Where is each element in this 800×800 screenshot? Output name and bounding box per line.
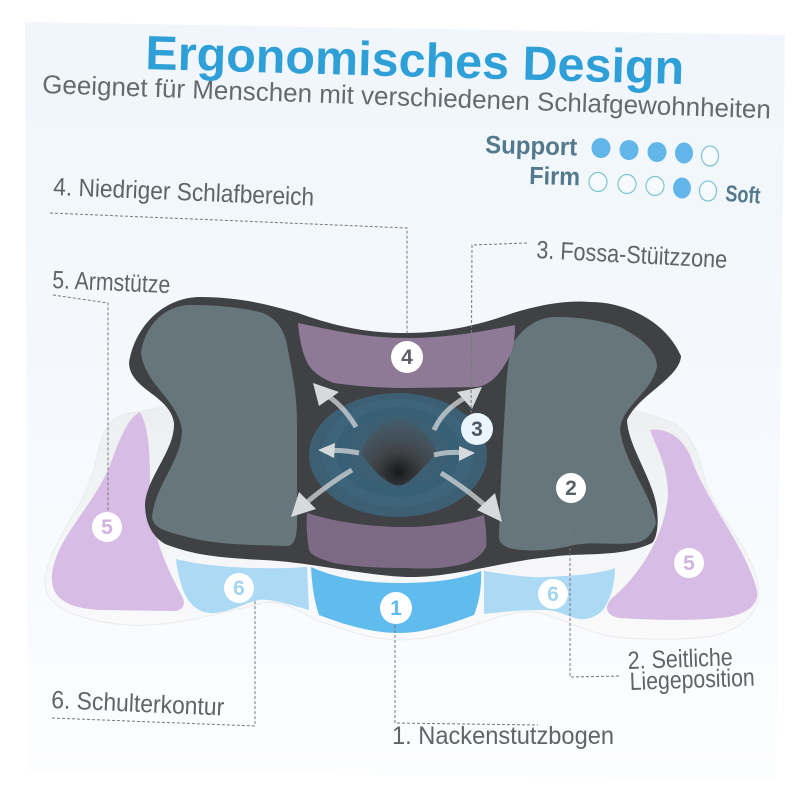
- right side panel: [499, 317, 657, 551]
- label 5: 5. Armstütze: [52, 266, 171, 299]
- badge 4: [391, 341, 423, 373]
- rating legend: [485, 131, 762, 208]
- badge 6 right: 6: [547, 583, 559, 606]
- subtitle: Geeignet für Menschen mit verschiedenen Schlafgewohnheiten: [42, 69, 771, 124]
- left shoulder contour: [176, 559, 309, 613]
- badge 6 left: 6: [233, 577, 245, 600]
- badge 3: [461, 413, 493, 445]
- label 2: [627, 643, 755, 696]
- badge 2: 2: [565, 477, 577, 500]
- title: Ergonomisches Design: [145, 27, 685, 95]
- fossa support rings: [309, 393, 487, 517]
- badge 5 right: 5: [683, 552, 695, 575]
- badge 5 left: 5: [101, 516, 113, 539]
- badge 6 left: [224, 573, 254, 603]
- label 2: 2. Seitliche: [627, 643, 733, 675]
- firm dots: [589, 172, 716, 201]
- badge 5 left: [92, 512, 122, 542]
- label 4: 4. Niedriger Schlafbereich: [53, 173, 315, 211]
- right shoulder contour: [484, 568, 615, 619]
- bottom purple zone: [307, 513, 486, 569]
- pillow illustration: [45, 297, 759, 640]
- left arm rest: [52, 412, 184, 611]
- label 1: 1. Nackenstutzbogen: [392, 722, 614, 750]
- badge 5 right: [674, 548, 704, 578]
- top low sleep zone: [298, 323, 515, 388]
- dark cover body: [129, 297, 681, 577]
- support dots: [592, 138, 718, 166]
- soft label: Soft: [725, 180, 762, 208]
- badge 3: 3: [471, 418, 483, 441]
- badge 1: 1: [390, 597, 402, 620]
- label 6: 6. Schulterkontur: [51, 686, 225, 722]
- left side panel: [141, 305, 297, 546]
- callout leader lines: [50, 213, 621, 726]
- badge 6 right: [538, 579, 568, 609]
- right arm rest: [607, 430, 757, 620]
- firm label: Firm: [529, 162, 581, 191]
- pressure arrows: [291, 383, 502, 522]
- badge 4: 4: [401, 346, 413, 369]
- badge 1: [380, 592, 412, 624]
- neck arch: [311, 567, 481, 633]
- support label: Support: [485, 131, 578, 161]
- badge 2: [556, 473, 586, 503]
- label 2: Liegeposition: [629, 664, 755, 696]
- white pillow base: [45, 400, 759, 640]
- fossa funnel: [361, 420, 436, 486]
- label 3: 3. Fossa-Stüitzzone: [536, 236, 728, 274]
